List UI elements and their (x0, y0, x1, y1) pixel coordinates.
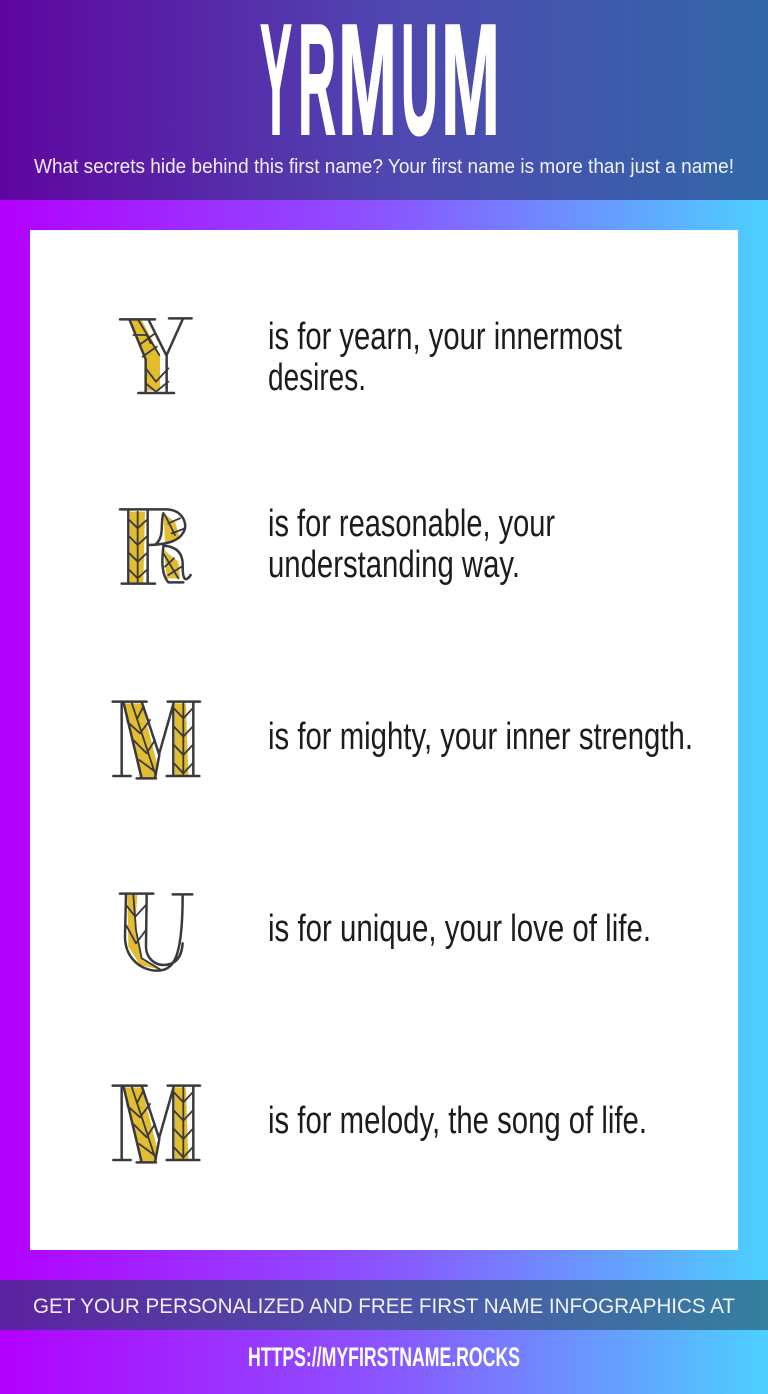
text: R line (268, 503, 555, 586)
text: R line: understanding way. (268, 544, 520, 586)
icon: letter M (113, 702, 200, 778)
text: R line: is for reasonable, your (268, 503, 555, 545)
icon: letter R (120, 509, 191, 584)
white content panel (30, 230, 738, 1250)
header band (0, 0, 768, 200)
text: Y line: is for yearn, your innermost (268, 316, 622, 358)
text: Y line (268, 316, 622, 399)
icon: letter Y (120, 318, 192, 393)
text: U line: is for unique, your love of life. (268, 908, 651, 950)
text: Y line: desires. (268, 357, 366, 399)
footer dark band (0, 1280, 768, 1330)
icon: letter M (second) (113, 1086, 200, 1162)
footer url: HTTPS://MYFIRSTNAME.ROCKS (248, 1342, 520, 1372)
text: M line (melody): is for melody, the song of life. (268, 1100, 647, 1142)
title: YRMUM (260, 0, 500, 168)
footer call to action: GET YOUR PERSONALIZED AND FREE FIRST NAME INFOGRAPHICS AT (33, 1295, 735, 1318)
icon: letter U (120, 894, 192, 971)
subtitle: What secrets hide behind this first name? Your first name is more than just a name! (34, 156, 734, 178)
